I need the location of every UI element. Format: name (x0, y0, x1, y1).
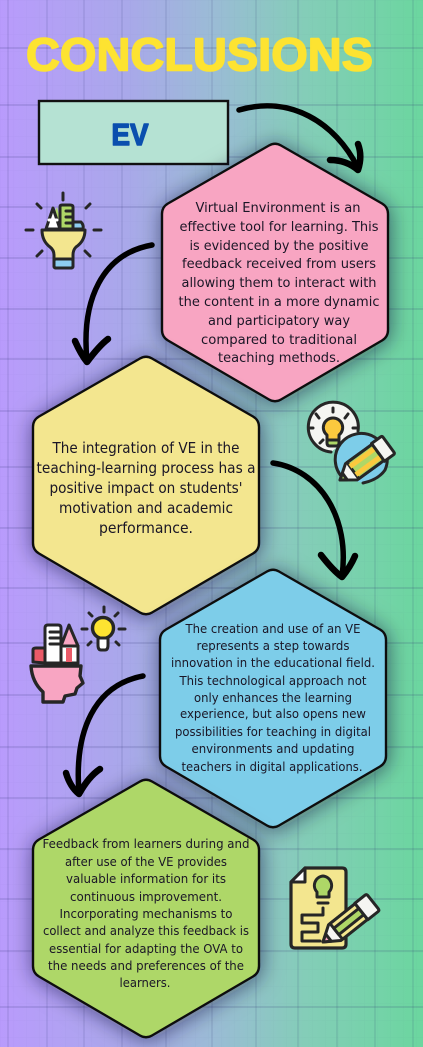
green hexagon text: after use of the VE provides (65, 855, 227, 870)
pink hexagon text: the content in a more dynamic (178, 294, 380, 310)
pink hexagon text: is evidenced by the positive (190, 238, 368, 254)
green hexagon text: Feedback from learners during and (42, 837, 250, 852)
pink hexagon text: feedback received from users (182, 256, 376, 272)
blue hexagon text: The creation and use of an VE (185, 622, 360, 637)
blue hexagon text: innovation in the educational field. (171, 656, 375, 671)
icon: lightbulb and pencil badge (308, 402, 395, 489)
arrow: pink to yellow hexagon (75, 245, 152, 362)
green hexagon text (42, 837, 250, 991)
yellow hexagon text: performance. (99, 519, 193, 537)
blue hexagon text: only enhances the learning (194, 691, 352, 706)
green hexagon text: essential for adapting the OVA to (49, 942, 243, 957)
pink hexagon text (178, 200, 380, 366)
yellow hexagon text: motivation and academic (59, 499, 233, 517)
blue hexagon text: environments and updating (192, 742, 354, 757)
blue hexagon text (171, 622, 375, 775)
green hexagon text: the needs and preferences of the (48, 959, 244, 974)
blue hexagon text: teachers in digital applications. (182, 760, 362, 775)
blue hexagon text: possibilities for teaching in digital (175, 725, 371, 740)
blue hexagon text: This technological approach not (179, 674, 366, 689)
arrow: EV box to pink hexagon (239, 106, 360, 170)
panel: blue hexagon (160, 570, 386, 827)
pink hexagon text: teaching methods. (218, 350, 340, 366)
panel: yellow hexagon (33, 357, 259, 614)
pink hexagon text: allowing them to interact with (182, 275, 376, 291)
pink hexagon text: compared to traditional (201, 332, 357, 348)
pink hexagon text: effective tool for learning. This (180, 219, 378, 235)
icon: lightbulb with school supplies (26, 193, 101, 268)
panel: pink hexagon (162, 144, 388, 401)
arrow: blue to green hexagon (66, 676, 143, 794)
yellow hexagon text: positive impact on students' (50, 479, 242, 497)
blue hexagon text: represents a step towards (196, 639, 350, 654)
title: CONCLUSIONS (26, 28, 373, 80)
green hexagon text: Incorporating mechanisms to (60, 907, 233, 922)
green hexagon text: valuable information for its (66, 872, 226, 887)
green hexagon text: learners. (120, 976, 170, 991)
pink hexagon text: Virtual Environment is an (196, 200, 360, 216)
panel: green hexagon (33, 780, 259, 1037)
green hexagon text: continuous improvement. (70, 890, 222, 905)
yellow hexagon text: The integration of VE in the (52, 439, 240, 457)
yellow hexagon text: teaching-learning process has a (36, 459, 256, 477)
arrow: yellow to blue hexagon (273, 463, 355, 577)
green hexagon text: collect and analyze this feedback is (43, 924, 249, 939)
icon: document with bulb and pencil (291, 868, 380, 950)
blue hexagon text: experience, but also opens new (180, 707, 366, 722)
panel: EV heading box (39, 101, 228, 164)
yellow hexagon text (36, 439, 256, 537)
pink hexagon text: and participatory way (208, 313, 350, 329)
icon: head with pencil and ruler (31, 607, 125, 702)
EV label: EV (112, 117, 149, 152)
